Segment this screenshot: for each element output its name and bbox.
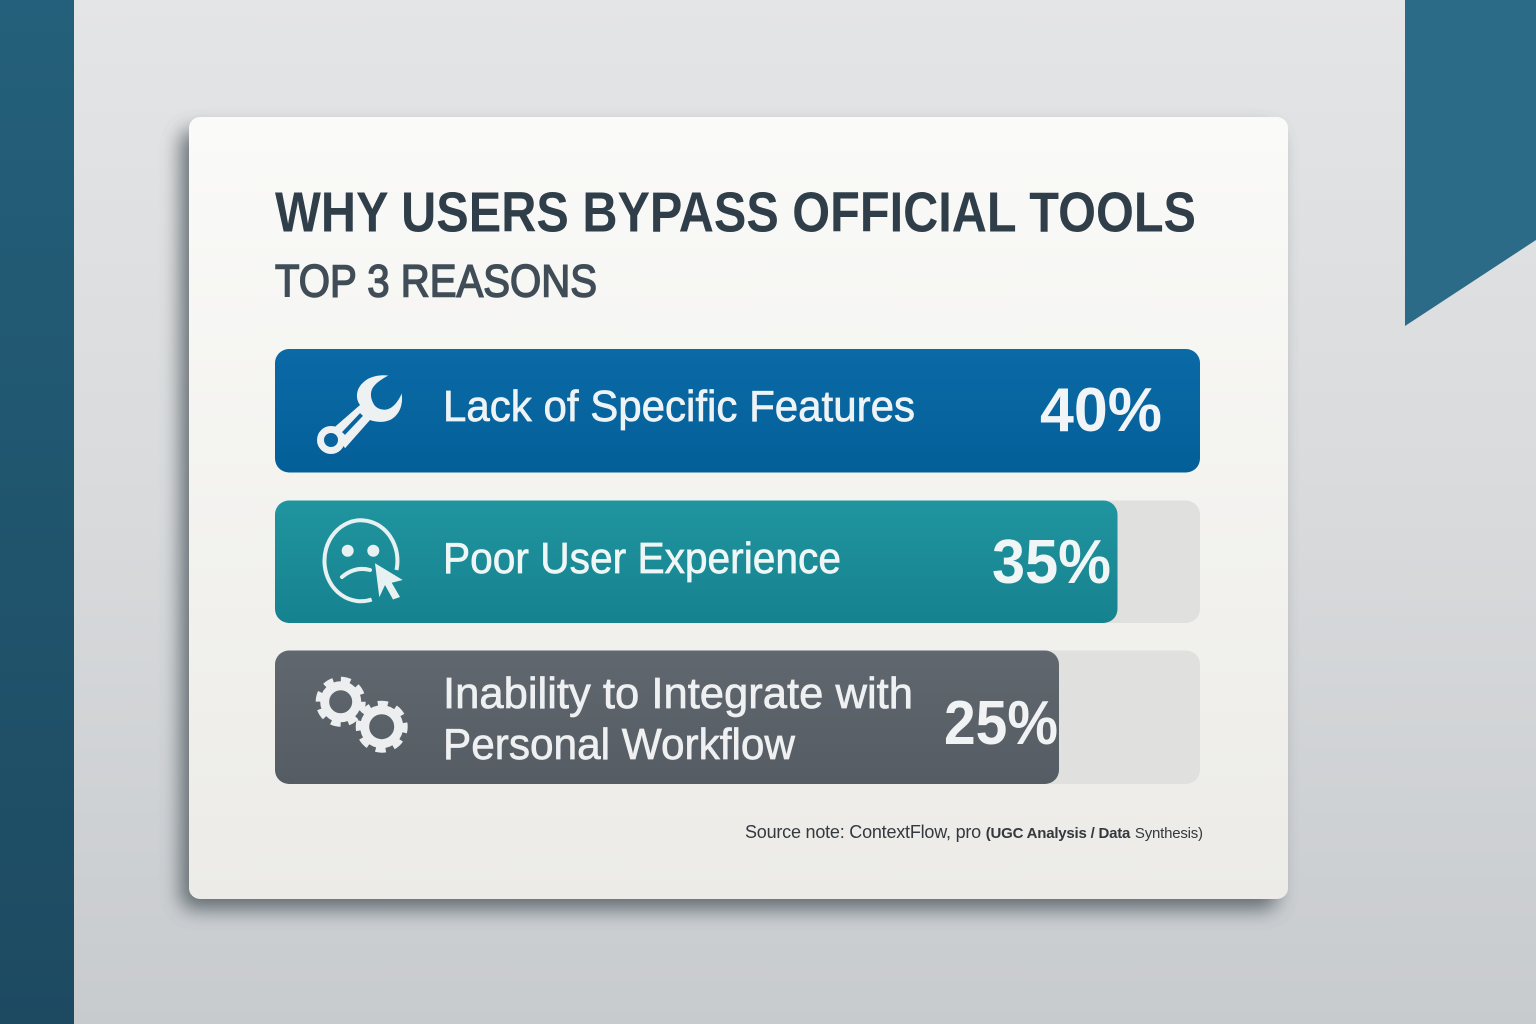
icon: gears [319,680,405,750]
value: 25% [944,689,1058,758]
bar track [275,650,1200,784]
label: Lack of Specific Features [443,382,915,431]
bar track [275,500,1200,623]
value: 40% [1040,376,1162,445]
source note: Source note: ContextFlow, pro (UGC Analysis / Data Synthesis) [745,822,1203,842]
label: Inability to Integrate with [443,669,913,718]
bar fill 25% [275,650,1059,784]
title: WHY USERS BYPASS OFFICIAL TOOLS [275,180,1196,244]
icon: wrench [320,375,402,450]
top right accent shape [1405,0,1536,326]
bar: poor user experience [275,500,1200,623]
bar: inability to integrate [275,650,1200,784]
icon: sad face with cursor [324,520,403,601]
card surface [189,117,1288,899]
bar fill 35% [275,500,1118,623]
panel: main card [181,117,1288,909]
subtitle: TOP 3 REASONS [275,256,597,306]
left accent band [0,0,74,1024]
label: Personal Workflow [443,720,795,769]
card shadow [181,130,1277,909]
bar: lack of specific features [275,349,1200,472]
bar fill 40% [275,349,1200,472]
value: 35% [992,528,1111,597]
label: Poor User Experience [443,534,841,583]
